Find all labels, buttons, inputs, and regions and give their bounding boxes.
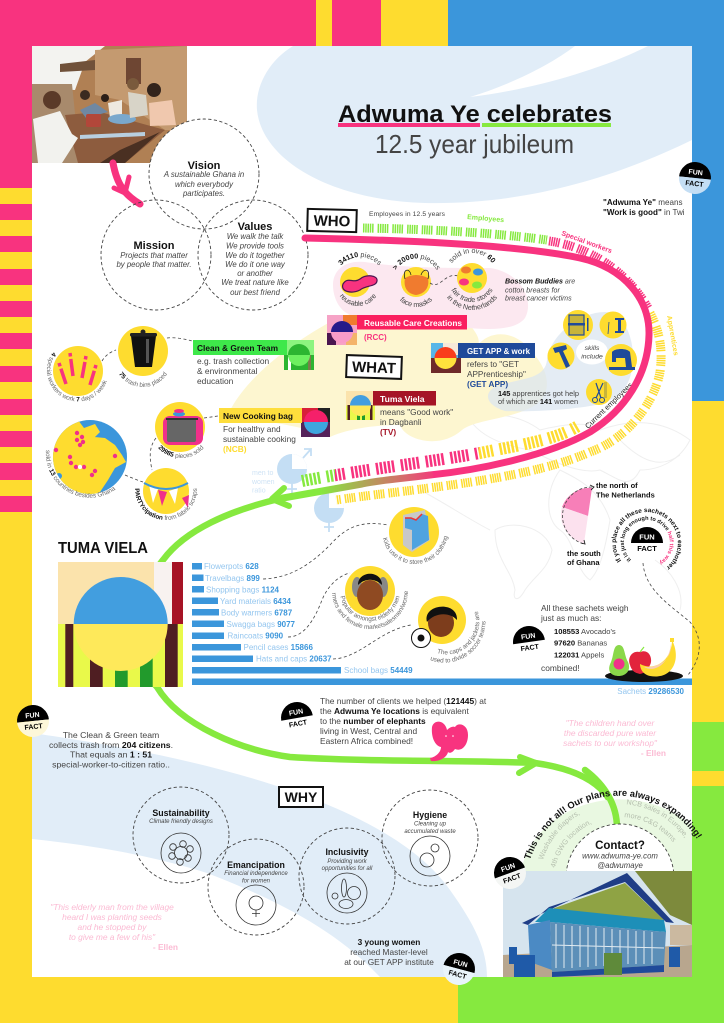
- expansion plans curved text: This is not all! Our plans are always expanding!: [524, 790, 702, 858]
- circle: emancipation: Emancipation: [227, 860, 285, 870]
- title background blob: [257, 46, 692, 203]
- party bunting: PARTYcipation from fabric scraps: [135, 488, 198, 520]
- fun fact: sachet weight: [511, 603, 629, 673]
- apprentices note: [498, 389, 579, 406]
- expansion plans curved text: Washable diapers,: [538, 812, 580, 859]
- group: face masks: face masks: [400, 297, 432, 307]
- lower background blob: [32, 733, 487, 977]
- circle: mission: by people that matter.: [116, 260, 192, 269]
- fun fact badge: FUN: [25, 712, 40, 720]
- note: bossom buddies: [505, 278, 575, 302]
- note: bossom buddies: Bossom Buddies are: [505, 278, 575, 286]
- GET APP label: [431, 343, 535, 389]
- fun fact badge: FACT: [685, 180, 704, 189]
- icon: globe: [53, 420, 127, 494]
- WHY heading: WHY: [285, 789, 318, 805]
- circle: hygiene: Hygiene: [413, 810, 447, 820]
- kids clothing note: [382, 507, 449, 564]
- WHAT heading: WHAT: [352, 359, 396, 377]
- tally: employees: [363, 228, 547, 240]
- circle: emancipation: for women: [242, 878, 271, 884]
- fun fact: Adwuma Ye meaning: [603, 160, 713, 217]
- expansion plans arc: [521, 799, 692, 871]
- note: bossom buddies: cotton breasts for: [505, 286, 560, 294]
- photo: blue workshop building: [503, 871, 692, 977]
- contact circle: @adwumaye: [597, 861, 643, 870]
- Tuma Viela label: means "Good work": [380, 407, 453, 417]
- timeline labels: Apprentices: [665, 315, 679, 356]
- icon: soccer ball: [412, 628, 430, 648]
- main timeline: pink to green path with arrow: [137, 238, 649, 828]
- skills label: include: [581, 354, 603, 360]
- party bunting: [135, 468, 198, 520]
- fun fact: elephants: Eastern Africa combined!: [320, 736, 413, 746]
- RCC label: Reusable Care Creations: [364, 318, 462, 328]
- fun fact: sachet weight: just as much as:: [540, 613, 602, 623]
- icon: trash bin: [118, 326, 168, 376]
- special workers: 4 special workers work 7 days / week: [46, 352, 107, 402]
- fun fact badge: FUN: [688, 169, 703, 177]
- new cooking bag: New Cooking bag: [223, 411, 293, 421]
- fun fact badge: FUN: [452, 959, 468, 969]
- cooking bags sold: [155, 402, 205, 459]
- WHY heading: [279, 787, 323, 807]
- gender ratio: ratio: [252, 488, 266, 494]
- faint world map: [420, 415, 690, 610]
- elderly face note: Popular amongst elderly men: [340, 596, 400, 622]
- apprentices note: of which are 141 women: [498, 397, 578, 406]
- fun fact badge: FUN: [639, 532, 655, 542]
- icon: Tuma Viela logo: [346, 391, 375, 420]
- apprentices note: 145 apprentices got help: [498, 389, 579, 398]
- young face note: The caps and jackets are: [438, 612, 480, 654]
- fun fact: elephants: The number of clients we helped (121445) at: [320, 696, 487, 706]
- quote: elderly man: heard I was planting seeds: [62, 912, 163, 922]
- icon: loom: [563, 310, 593, 340]
- circle: vision: participates.: [182, 189, 225, 198]
- WHO heading: [307, 209, 357, 232]
- pale yellow WHAT blob: [227, 313, 547, 441]
- circle: inclusivity: [299, 828, 395, 924]
- circle: hygiene: accumulated waste: [404, 829, 456, 835]
- title: Adwuma Ye celebrates: [338, 101, 612, 128]
- fun fact badge: [631, 527, 663, 553]
- circle: values: [198, 200, 308, 310]
- fun fact: Adwuma Ye meaning: "Work is good" in Twi: [603, 208, 685, 217]
- new cooking bag: sustainable cooking: [223, 434, 296, 444]
- bar chart: products: Flowerpots 628: [204, 562, 259, 571]
- quote: children: - Ellen: [641, 748, 666, 758]
- expansion plans curved text: more C&G teams: [624, 813, 676, 842]
- GET APP label: (GET APP): [467, 380, 508, 389]
- new cooking bag: (NCB): [223, 444, 247, 454]
- timeline labels: Current employees: [583, 380, 635, 430]
- expansion plans curved text: NCB sales in Europe,: [626, 799, 686, 838]
- globe: countries sold: [46, 420, 127, 498]
- clean and green team: & environmental: [197, 366, 258, 376]
- icon: diverse shapes: [327, 873, 367, 913]
- circle: values: We walk the talk: [227, 232, 284, 241]
- quote: elderly man: to give me a few of his": [69, 932, 156, 942]
- circle: emancipation: Financial independence: [224, 871, 288, 877]
- fun fact badge: FACT: [289, 719, 308, 729]
- timeline labels: Employees: [467, 214, 504, 224]
- fun fact: sachet weight: combined!: [541, 663, 580, 673]
- bar chart: products: Pencil cases 15866: [244, 643, 313, 652]
- group: face masks: > 20000 pieces: [392, 254, 440, 270]
- icon: flower: [161, 833, 201, 873]
- north south chart: [561, 481, 655, 567]
- circle: values: our best friend: [230, 288, 281, 297]
- trash bins: [118, 326, 168, 387]
- fun fact: sachet weight: 97620 Bananas: [554, 638, 607, 648]
- fun fact badge on building: FUN: [500, 863, 516, 874]
- bar chart: products: Shopping bags 1124: [206, 586, 280, 594]
- tally: special workers: [549, 241, 648, 308]
- fun fact: young women: at our GET APP institute: [344, 957, 434, 967]
- north south chart: the north of: [596, 481, 638, 490]
- icon: face mask: [401, 267, 431, 297]
- link between masks and stores: [430, 275, 458, 285]
- icon: elderly face: [345, 566, 395, 616]
- clean and green team: [193, 340, 314, 386]
- Tuma Viela label: (TV): [380, 427, 396, 437]
- icon: female symbol: [236, 885, 276, 925]
- fun fact: sachet weight: All these sachets weigh: [541, 603, 629, 613]
- icon: bubbles: [410, 836, 450, 876]
- bar chart: products: Hats and caps 20637: [256, 654, 332, 664]
- circle: hygiene: Cleaning up: [414, 822, 447, 828]
- fun fact: Adwuma Ye meaning: "Adwuma Ye" means: [603, 198, 683, 207]
- new cooking bag: [219, 408, 330, 454]
- title: [338, 101, 612, 159]
- fun fact badge: [439, 949, 479, 989]
- young face note: [411, 596, 486, 663]
- fun fact badge: FUN: [521, 633, 536, 642]
- circle: vision: A sustainable Ghana in: [163, 170, 244, 179]
- quote: elderly man: - Ellen: [153, 942, 178, 952]
- group: fair trade stores: in the Netherlands: [447, 294, 497, 310]
- clean and green team: e.g. trash collection: [197, 356, 269, 366]
- photo: people at a table: [32, 46, 187, 163]
- icon: clean and green logo: [284, 340, 314, 370]
- contact circle: Contact?: [595, 840, 645, 852]
- icon: needle and thread: [600, 312, 626, 338]
- quote: elderly man: "This elderly man from the village: [50, 902, 174, 912]
- fun fact badge: FUN: [288, 708, 304, 718]
- fun fact badge: [15, 703, 51, 739]
- group: face masks: [392, 254, 440, 307]
- elderly face note: farmers and female marketsalesmen/women: [332, 591, 408, 630]
- note: bossom buddies: breast cancer victims: [505, 294, 572, 302]
- bar chart: products: Sachets 29286530: [617, 687, 685, 696]
- circle: sustainability: Climate friendly designs: [149, 819, 213, 825]
- green arrow end over the arc: [585, 770, 617, 828]
- GET APP label: GET APP & work: [467, 346, 530, 356]
- circle: values: We do it together: [225, 251, 285, 260]
- pale pink RCC blob: [333, 262, 528, 329]
- circle: sustainability: Sustainability: [152, 808, 210, 818]
- bar chart: products: Body warmers 6787: [221, 608, 293, 618]
- fun fact: sachet weight: 108553 Avocado's: [554, 627, 616, 636]
- expansion plans curved text: 4th GWG location,: [550, 822, 592, 868]
- employees timeline label: Employees in 12.5 years: [369, 211, 446, 218]
- pink arrow from photo to mission: [113, 163, 140, 204]
- TUMA VIELA heading: TUMA VIELA: [58, 540, 148, 557]
- gender ratio: [251, 449, 344, 532]
- bar chart: products: [192, 562, 692, 696]
- circle: inclusivity: Providing work: [327, 859, 368, 865]
- group: fair trade stores: sold in over 60: [450, 249, 496, 263]
- elderly face note: [332, 566, 408, 630]
- fun fact badge: [677, 160, 713, 196]
- circle: hygiene: [382, 790, 478, 886]
- icon: cooking pot: [155, 402, 205, 452]
- icon: scissors: [586, 379, 612, 405]
- circle: vision: Vision: [188, 160, 221, 172]
- cooking bags sold: 29985 pieces sold: [158, 445, 204, 459]
- icon: special worker ticks: [53, 346, 103, 396]
- icon: hammer: [548, 342, 574, 370]
- fun fact badge: [278, 699, 314, 731]
- fun fact: sachets ring: it is just long enough to drive half this way: [620, 516, 674, 565]
- GET APP label: refers to "GET: [467, 360, 519, 369]
- circle: vision: [149, 119, 259, 229]
- Tuma Viela large logo: [58, 562, 183, 687]
- icon: bunting: [143, 468, 189, 514]
- north south chart: The Netherlands: [596, 490, 655, 500]
- fun fact: elephants: the Adwuma Ye locations is equivalent: [320, 706, 469, 716]
- fun fact: elephants: [278, 696, 487, 761]
- bar chart: products: Swagga bags 9077: [226, 620, 296, 629]
- RCC label: (RCC): [364, 333, 387, 342]
- GET APP label: APPrenticeship": [467, 370, 526, 379]
- group: fair trade stores: [447, 249, 497, 310]
- icon: men symbol: [277, 449, 311, 493]
- fun fact badge: FACT: [24, 723, 44, 732]
- fun fact: clean and green: The Clean & Green team: [63, 730, 159, 740]
- contact circle: [566, 824, 674, 932]
- group: reusable care: 34110 pieces: [338, 252, 381, 265]
- circle: values: Values: [238, 221, 272, 233]
- fun fact badge: FACT: [448, 970, 468, 981]
- Tuma Viela label: Tuma Viela: [380, 394, 425, 404]
- quote: elderly man: [50, 902, 178, 952]
- bar chart: products: Yard materials 6434: [220, 597, 292, 606]
- group: fair trade stores: fair trade stores: [452, 288, 492, 302]
- timeline labels: Special workers: [560, 230, 613, 255]
- skills group: [498, 310, 637, 406]
- skills label: [576, 340, 608, 364]
- globe: countries sold: sold in 13 countries besides Ghana: [46, 450, 116, 498]
- circle: emancipation: [208, 839, 304, 935]
- icon: reusable pad: [340, 267, 377, 297]
- circle: values: We treat nature like: [221, 278, 289, 287]
- icon: RCC logo: [327, 315, 357, 345]
- WHO heading: WHO: [313, 213, 351, 230]
- fun fact: clean and green: special-worker-to-citizen ratio..: [52, 760, 170, 770]
- young face note: used to divide soccer teams: [430, 621, 486, 663]
- circle: mission: Mission: [134, 240, 175, 252]
- gender ratio: men to: [252, 470, 274, 477]
- trash bins: 75 trash bins placed: [119, 372, 167, 387]
- icon: elephant: [430, 722, 468, 761]
- circle: sustainability: [133, 787, 229, 883]
- quote: children: "The children hand over: [566, 718, 656, 728]
- circle: mission: [101, 200, 211, 310]
- new cooking bag: For healthy and: [223, 424, 281, 434]
- icon: bag of clothes: [389, 507, 439, 557]
- bar chart: products: Travelbags 899: [205, 574, 260, 583]
- clean and green team: Clean & Green Team: [197, 343, 278, 353]
- circle: inclusivity: Inclusivity: [325, 847, 369, 857]
- quote: children: sachets to our workshop": [563, 738, 658, 748]
- fun fact: clean and green: collects trash from 204 citizens.: [49, 740, 173, 750]
- quote: children: the discarded pure water: [564, 728, 657, 738]
- icon: fruits: [605, 638, 683, 682]
- bar chart: products: Raincoats 9090: [228, 632, 284, 640]
- timeline labels: [467, 214, 679, 430]
- group: reusable care: reusable care: [340, 294, 376, 306]
- clean and green team: education: [197, 376, 234, 386]
- title: 12.5 year jubileum: [375, 129, 574, 159]
- quote: elderly man: and he stopped by: [78, 922, 147, 932]
- fun fact: young women: 3 young women: [358, 937, 420, 947]
- fun fact: sachet weight: 122031 Appels: [554, 650, 604, 660]
- WHAT heading: [346, 355, 402, 379]
- skills label: skills: [585, 345, 600, 352]
- icon: coloured masks: [457, 263, 487, 293]
- fun fact: young women: [344, 937, 479, 989]
- tally: apprentices: [336, 313, 661, 500]
- Tuma Viela label: [346, 391, 453, 437]
- fun fact badge on building: [489, 852, 531, 894]
- fun fact: elephants: to the number of elephants: [320, 716, 426, 726]
- fun fact: clean and green: [15, 703, 173, 770]
- icon: young face: [418, 596, 466, 644]
- Tuma Viela label: in Dagbanli: [380, 417, 422, 427]
- fun fact badge: FACT: [637, 544, 657, 553]
- quote: children: [563, 718, 666, 758]
- fun fact badge: FACT: [520, 644, 540, 653]
- icon: GET APP logo: [431, 343, 461, 373]
- RCC label: [327, 315, 467, 345]
- dashed links: [102, 338, 699, 675]
- fun fact: elephants: living in West, Central and: [320, 726, 417, 736]
- circle: values: We do it one way: [225, 260, 286, 269]
- circle: mission: Projects that matter: [120, 251, 188, 260]
- circle: inclusivity: opportunities for all: [322, 866, 373, 872]
- icon: sewing machine: [605, 344, 637, 376]
- north south chart: the south: [567, 549, 601, 558]
- north south chart: of Ghana: [567, 558, 600, 567]
- icon: women symbol: [314, 493, 344, 532]
- pale blue skills blob: [488, 312, 633, 411]
- contact circle: www.adwuma-ye.com: [582, 852, 658, 860]
- tally: current employees: [302, 426, 578, 481]
- fun fact: sachets ring: If you place all these sachets next to eachother: [612, 508, 682, 570]
- fun fact badge on building: FACT: [502, 872, 523, 886]
- gender ratio: women: [251, 479, 275, 486]
- kids clothing note: Kids use it to store their clothing: [382, 536, 449, 564]
- bar chart: products: School bags 54449: [344, 666, 413, 675]
- fun fact badge: [511, 624, 546, 654]
- fun fact: clean and green: That equals an 1 : 51: [70, 750, 152, 760]
- fun fact: young women: reached Master-level: [350, 947, 428, 957]
- circle: vision: which everybody: [175, 180, 234, 189]
- circle: values: or another: [237, 269, 273, 278]
- circle: values: We provide tools: [226, 242, 284, 250]
- icon: cooking bag logo: [301, 408, 330, 437]
- group: reusable care: [338, 252, 381, 306]
